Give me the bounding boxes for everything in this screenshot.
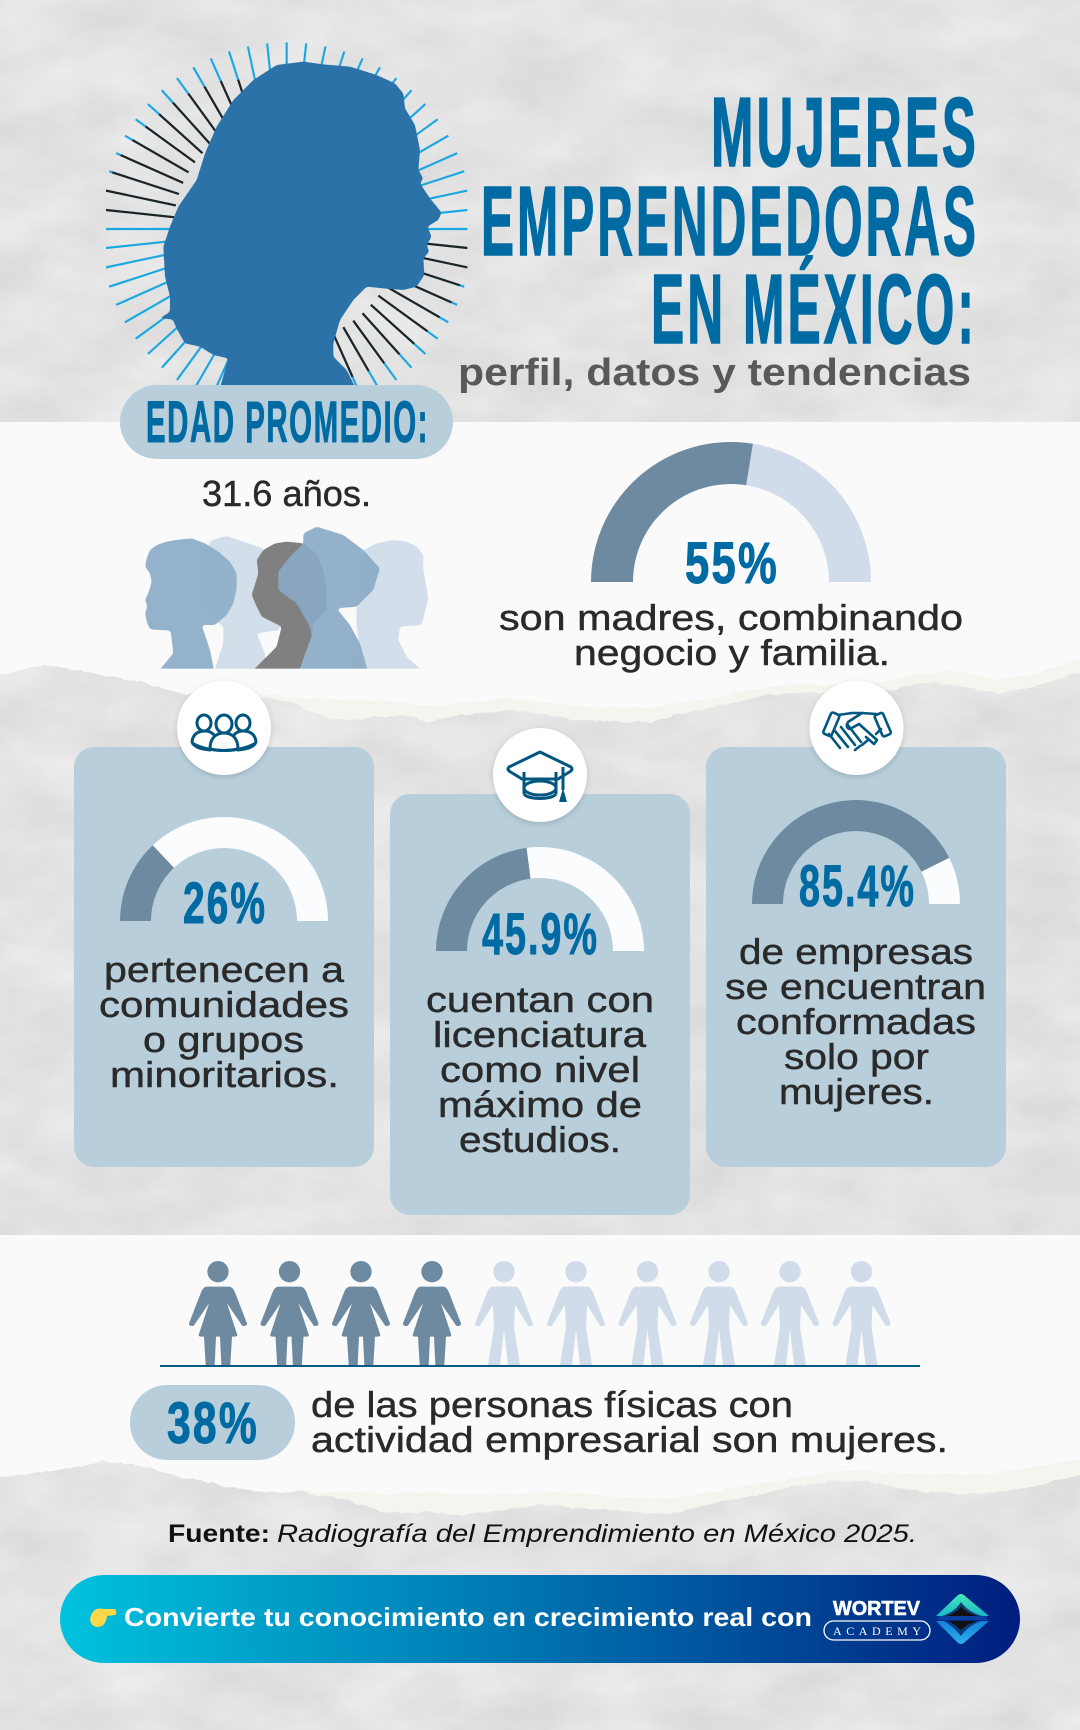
companies caption: de empresas	[739, 931, 973, 972]
companies caption	[725, 931, 986, 1112]
minority caption	[99, 949, 349, 1095]
panel: mothers	[499, 442, 963, 673]
percentage 45.9: 45.9%	[482, 902, 599, 967]
companies caption: se encuentran	[725, 966, 986, 1007]
age value: 31.6 años.	[202, 473, 371, 514]
panel: average age	[120, 385, 453, 679]
minority caption: minoritarios.	[110, 1054, 339, 1095]
source line: Radiografía del Emprendimiento en México 2025.	[277, 1520, 917, 1548]
degree caption: licenciatura	[433, 1014, 647, 1055]
companies caption: mujeres.	[779, 1071, 934, 1112]
degree caption: máximo de	[438, 1084, 642, 1125]
percentage 26: 26%	[183, 871, 267, 936]
degree caption: cuentan con	[426, 979, 654, 1020]
icon: woman silhouette	[150, 62, 442, 393]
source line: Fuente:	[168, 1520, 270, 1548]
call to action banner	[60, 1575, 1020, 1663]
gauge 85.4%	[752, 800, 960, 904]
share caption: actividad empresarial son mujeres.	[311, 1419, 948, 1460]
share caption	[311, 1384, 948, 1460]
age pill: EDAD PROMEDIO:	[146, 390, 429, 455]
logo: Wortev Academy wordmark: ACADEMY	[833, 1624, 921, 1638]
percentage pill 38	[130, 1385, 295, 1460]
panel: degree card	[390, 794, 690, 1215]
percentage pill 38: 38%	[167, 1391, 259, 1456]
lower white band with torn edge	[0, 1235, 1080, 1515]
mothers caption: negocio y familia.	[574, 632, 890, 673]
sunburst rays	[100, 42, 473, 416]
logo: Wortev Academy wordmark	[824, 1598, 930, 1640]
degree caption: como nivel	[440, 1049, 640, 1090]
mothers caption: son madres, combinando	[499, 597, 963, 638]
gauge 26%	[120, 817, 328, 921]
logo: diamond mark	[936, 1594, 989, 1644]
minority caption: comunidades	[99, 984, 349, 1025]
logo: Wortev Academy wordmark: WORTEV	[833, 1598, 921, 1620]
age pill	[120, 385, 453, 459]
degree caption: estudios.	[459, 1119, 621, 1160]
upper white band with torn edge	[0, 422, 1080, 722]
subtitle: perfil, datos y tendencias	[458, 352, 971, 394]
minority caption: o grupos	[143, 1019, 304, 1060]
minority caption: pertenecen a	[104, 949, 345, 990]
pictogram row of ten figures	[160, 1261, 920, 1367]
icon: graduation cap in white circle	[493, 728, 587, 822]
title	[481, 77, 979, 364]
icon: group of women profiles	[130, 527, 450, 679]
icon: handshake in white circle	[810, 681, 904, 775]
panel: minority groups card	[74, 747, 374, 1167]
percentage 55: 55%	[685, 531, 779, 596]
gauge 45.9%	[436, 847, 644, 951]
degree caption	[426, 979, 654, 1160]
percentage 85.4: 85.4%	[799, 854, 916, 919]
call to action text: Convierte tu conocimiento en crecimiento real con	[124, 1602, 812, 1632]
panel: women share pictogram	[130, 1261, 948, 1460]
share caption: de las personas físicas con	[311, 1384, 793, 1425]
gauge 55%	[591, 442, 871, 582]
companies caption: solo por	[784, 1036, 929, 1077]
icon: pointing hand	[90, 1608, 116, 1627]
companies caption: conformadas	[736, 1001, 976, 1042]
mothers caption	[499, 597, 963, 673]
panel: women-only companies card	[706, 747, 1006, 1167]
icon: people in white circle	[177, 681, 271, 775]
